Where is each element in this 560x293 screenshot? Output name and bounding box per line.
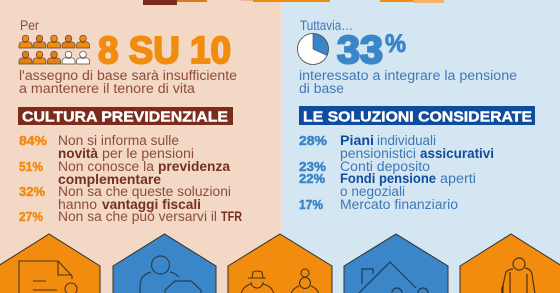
icon panel: person with shield [113, 234, 216, 293]
icon panel: elderly person [460, 234, 560, 293]
text: left statement [19, 68, 237, 96]
list: left statistics: Non sa che può versarvi il [58, 209, 217, 224]
list: right statistics: o negoziali [340, 184, 405, 199]
list: right statistics: Fondi pensione [340, 171, 436, 186]
list: left statistics [19, 133, 242, 224]
list: left statistics: 51% [19, 159, 43, 174]
list: right statistics: pensionistici [340, 146, 416, 161]
list: right statistics: aperti [440, 171, 476, 186]
list: right statistics: 28% [299, 133, 327, 148]
heading: 8 su 10: 8 SU 10 [98, 30, 231, 72]
list: left statistics: TFR [221, 209, 242, 224]
text: right statement: interessato a integrare la pensione [299, 68, 517, 83]
list: left statistics: Non sa che queste soluzioni [58, 184, 231, 199]
list: right statistics: 17% [299, 197, 323, 212]
list: left statistics: Non si informa sulle [58, 133, 179, 148]
icon panel: elderly couple [228, 234, 332, 293]
list: right statistics: 23% [299, 159, 326, 174]
heading: 33 percent: 33 [337, 29, 383, 72]
list: left statistics: 84% [19, 133, 47, 148]
text: left statement: l'assegno di base sarà insufficiente [19, 68, 237, 83]
list: right statistics [299, 133, 494, 212]
icon panel: house [344, 234, 448, 293]
heading banner: le soluzioni considerate: LE SOLUZIONI CONSIDERATE [303, 108, 532, 126]
list: right statistics: assicurativi [420, 146, 494, 161]
heading: 33 percent [337, 29, 406, 72]
list: right statistics: Piani [340, 133, 374, 148]
text: right statement [299, 68, 517, 96]
heading banner: cultura previdenziale: CULTURA PREVIDENZIALE [22, 108, 228, 126]
list: left statistics: complementare [58, 172, 161, 187]
list: left statistics: novità [58, 146, 98, 161]
list: left statistics: hanno [58, 197, 97, 212]
icon: ten people, eight highlighted [19, 35, 90, 64]
top edge colour bars [143, 0, 444, 5]
list: right statistics: individuali [377, 133, 436, 148]
list: left statistics: vantaggi fiscali [102, 197, 201, 212]
list: right statistics: Conti deposito [340, 159, 430, 174]
icon panel: document and person [0, 234, 100, 293]
list: left statistics: per le pensioni [102, 146, 194, 161]
list: left statistics: 27% [19, 209, 43, 224]
list: right statistics: 22% [299, 171, 325, 186]
list: left statistics: previdenza [158, 159, 230, 174]
list: right statistics: Mercato finanziario [340, 197, 458, 212]
text: Tuttavia: Tuttavia… [300, 18, 353, 33]
text: Per: Per [20, 18, 39, 33]
text: left statement: a mantenere il tenore di vita [19, 81, 196, 96]
panel: left background [0, 0, 281, 293]
list: left statistics: 32% [19, 184, 45, 199]
panel: right background [281, 0, 560, 293]
heading: 33 percent: % [385, 30, 406, 58]
text: right statement: di base [299, 81, 344, 96]
icon: pie chart one third [298, 34, 328, 64]
list: left statistics: Non conosce la [58, 159, 155, 174]
